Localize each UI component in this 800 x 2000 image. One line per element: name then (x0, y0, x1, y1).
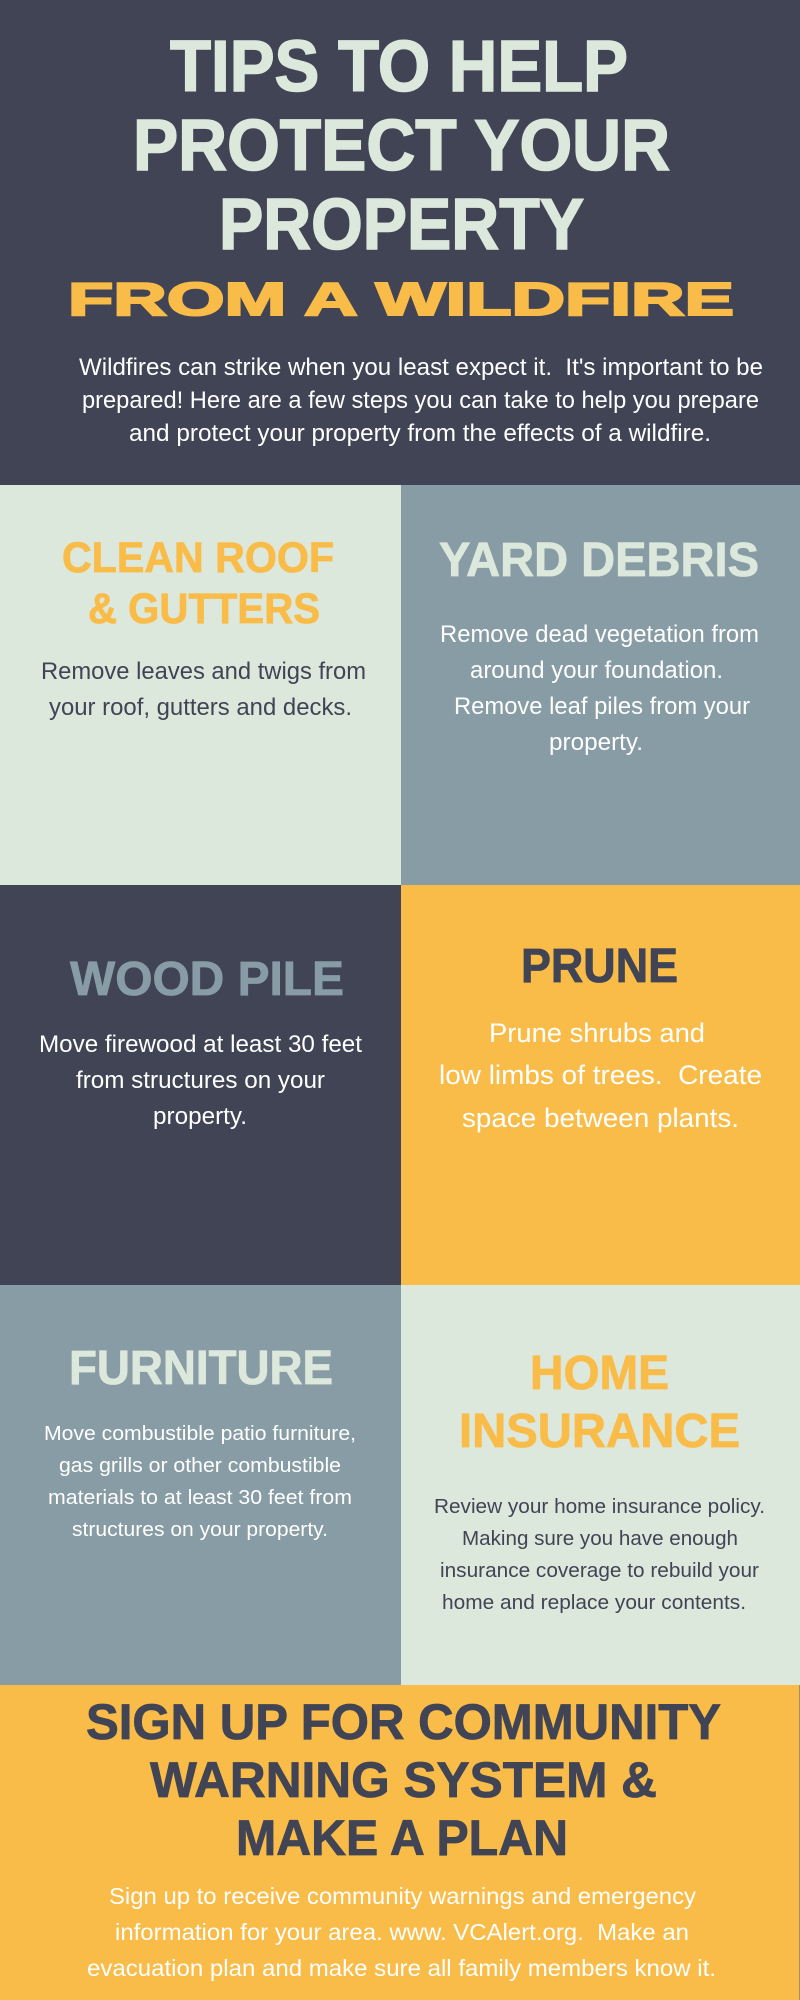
panel: home insurance (401, 1285, 800, 1685)
title (133, 27, 670, 265)
panel: wood pile (0, 885, 401, 1285)
body: prune (439, 1018, 762, 1133)
heading: clean roof and gutters: & GUTTERS (88, 585, 320, 633)
body: yard debris: property. (549, 729, 643, 756)
body: home insurance (434, 1496, 765, 1614)
body: furniture (44, 1423, 356, 1541)
body: sign up: Sign up to receive community warnings and emergency (109, 1883, 696, 1909)
body: yard debris: Remove leaf piles from your (454, 693, 750, 720)
body: home insurance: home and replace your contents. (442, 1592, 746, 1614)
intro text (79, 354, 763, 447)
body: sign up: information for your area. www. VCAlert.org. Make an (115, 1919, 689, 1945)
body: clean roof and gutters: your roof, gutters and decks. (49, 694, 352, 721)
heading: clean roof and gutters: CLEAN ROOF (62, 534, 334, 582)
body: clean roof and gutters: Remove leaves and twigs from (41, 658, 366, 685)
heading: home insurance (459, 1347, 740, 1458)
panel: furniture (0, 1285, 401, 1685)
body: yard debris (440, 621, 759, 756)
body: prune: low limbs of trees. Create (439, 1060, 762, 1090)
body: prune: Prune shrubs and (489, 1018, 705, 1048)
panel: yard debris (401, 485, 800, 885)
title: PROTECT YOUR (133, 106, 670, 186)
body: home insurance: Making sure you have enough (462, 1528, 738, 1550)
body: prune: space between plants. (462, 1103, 739, 1133)
body: furniture: materials to at least 30 feet from (48, 1487, 352, 1509)
heading: prune: PRUNE (521, 940, 678, 993)
heading: sign up: WARNING SYSTEM & (150, 1752, 657, 1808)
heading: sign up: MAKE A PLAN (236, 1810, 568, 1866)
intro text: prepared! Here are a few steps you can take to help you prepare (82, 387, 759, 414)
heading: home insurance: HOME (530, 1347, 669, 1400)
intro text: and protect your property from the effects of a wildfire. (129, 420, 711, 447)
body: furniture: gas grills or other combustible (59, 1455, 341, 1477)
panel: sign up call to action (0, 1685, 800, 2000)
subtitle: FROM A WILDFIRE (68, 273, 734, 325)
heading: furniture: FURNITURE (69, 1342, 333, 1395)
title: TIPS TO HELP (170, 27, 628, 107)
body: furniture: Move combustible patio furniture, (44, 1423, 356, 1445)
panel: clean roof and gutters (0, 485, 401, 885)
body: wood pile: property. (153, 1103, 247, 1130)
body: wood pile (39, 1031, 362, 1130)
intro text: Wildfires can strike when you least expect it. It's important to be (79, 354, 763, 381)
body: yard debris: Remove dead vegetation from (440, 621, 759, 648)
heading: sign up: SIGN UP FOR COMMUNITY (86, 1694, 721, 1750)
panel: header (0, 0, 800, 485)
body: wood pile: from structures on your (76, 1067, 325, 1094)
heading: home insurance: INSURANCE (459, 1405, 740, 1458)
body: sign up (87, 1883, 716, 1981)
body: wood pile: Move firewood at least 30 feet (39, 1031, 362, 1058)
heading: yard debris: YARD DEBRIS (439, 534, 759, 587)
panel: prune (401, 885, 800, 1285)
body: home insurance: Review your home insurance policy. (434, 1496, 765, 1518)
title: PROPERTY (219, 185, 584, 265)
body: yard debris: around your foundation. (470, 657, 723, 684)
heading: wood pile: WOOD PILE (70, 953, 344, 1006)
heading: clean roof and gutters (62, 534, 334, 633)
body: clean roof and gutters (41, 658, 366, 721)
body: furniture: structures on your property. (72, 1519, 328, 1541)
heading: sign up (86, 1694, 721, 1866)
body: sign up: evacuation plan and make sure all family members know it. (87, 1955, 716, 1981)
body: home insurance: insurance coverage to rebuild your (440, 1560, 759, 1582)
